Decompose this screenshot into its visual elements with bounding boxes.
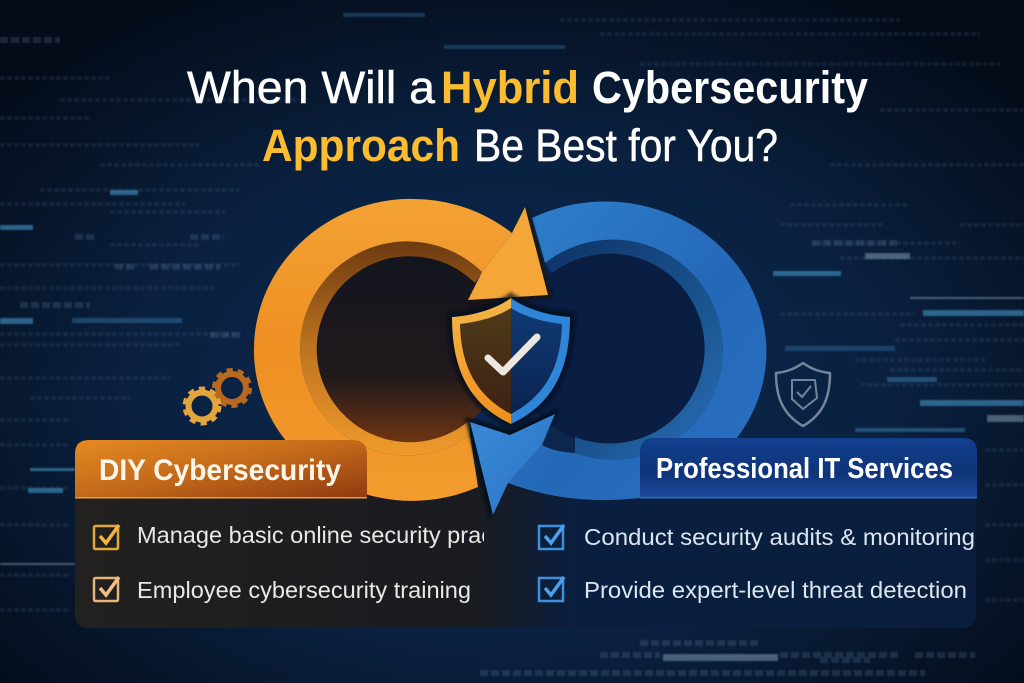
list: DIY items [94,522,493,603]
blue inner lip [545,240,723,460]
orange arrowhead [466,204,552,304]
item: audits and monitoring: Conduct security audits & monitoring [584,524,975,550]
header: DIY Cybersecurity: DIY Cybersecurity [99,454,341,487]
title: Approach [262,120,460,171]
header: Professional IT Services: Professional IT Services [656,453,953,485]
item: threat detection: Provide expert-level threat detection [584,577,967,603]
title: Hybrid [441,62,579,113]
list: professional items [539,524,975,603]
orange hole [316,255,504,443]
icon: outline shield [776,363,830,426]
blue hole [514,253,706,445]
title: When Will a [187,62,436,113]
title [187,62,868,171]
orange loop band [254,199,512,501]
diagram: interlocking loops [254,199,766,520]
header: DIY Cybersecurity [75,440,367,498]
blue arrowhead [465,409,558,520]
icon: central shield with check [447,292,575,429]
item: employee training: Employee cybersecurity training [137,577,471,603]
orange inner lip [300,241,482,455]
icon: gears [185,370,250,423]
blue loop band [508,202,766,500]
panel: comparison body [75,470,976,628]
header: Professional IT Services [640,438,977,498]
item: manage basic practices: Manage basic online security prac [137,522,493,548]
title: Be Best for You? [474,120,778,171]
title: Cybersecurity [592,62,868,113]
